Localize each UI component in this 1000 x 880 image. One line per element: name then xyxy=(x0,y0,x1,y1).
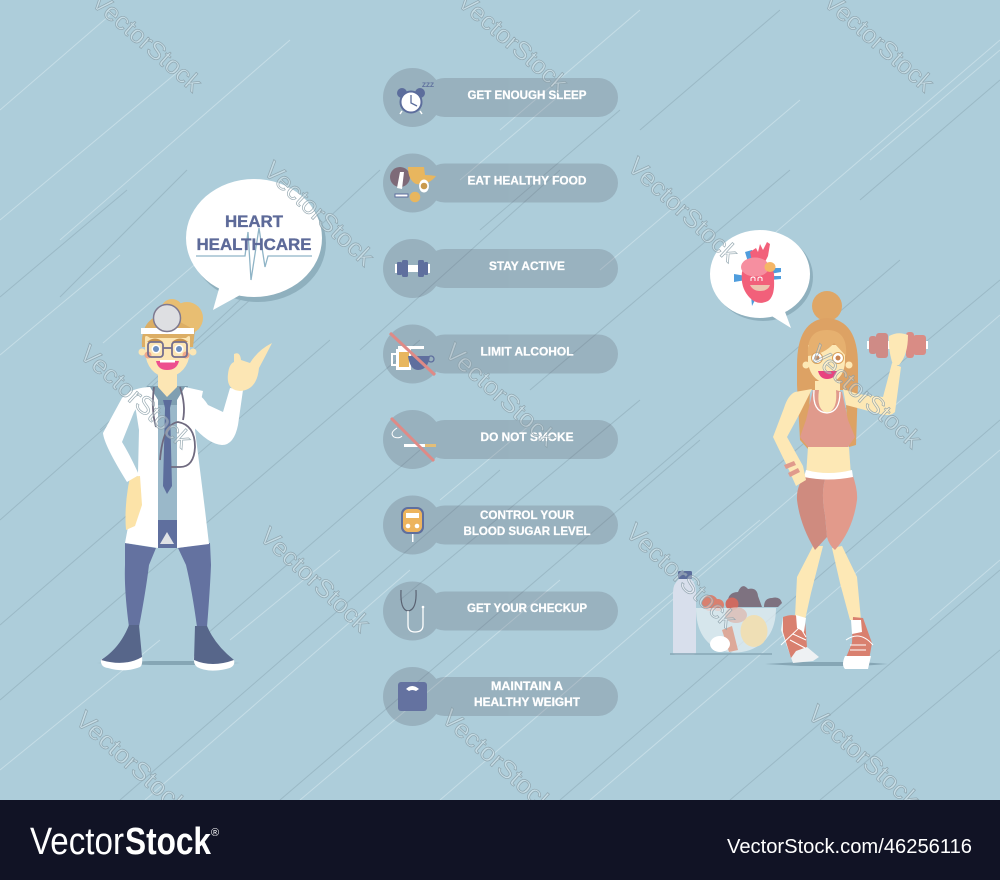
head mirror xyxy=(154,304,180,332)
footer logo: ® xyxy=(211,827,219,839)
watermarks: VectorStock xyxy=(804,340,927,454)
icon: healthy food xyxy=(390,167,436,202)
row: stay active xyxy=(383,239,618,298)
woman face xyxy=(802,330,852,384)
icon: weighing scale xyxy=(398,682,427,711)
water bottle xyxy=(673,571,696,655)
bowl glass xyxy=(696,608,776,652)
row: get your checkup: GET YOUR CHECKUP xyxy=(467,603,587,615)
doctor glasses xyxy=(148,342,187,357)
stethoscope xyxy=(153,387,195,467)
woman hair back xyxy=(797,291,858,449)
doctor ground shadow xyxy=(97,661,240,665)
watermarks: VectorStock xyxy=(436,704,559,818)
dumbbell held by woman xyxy=(867,332,928,365)
icon: crossed cigarette xyxy=(391,418,436,461)
footer logo xyxy=(30,821,219,863)
icon: alarm clock: ZZZ xyxy=(422,82,434,89)
row: maintain a healthy weight xyxy=(383,667,618,726)
doctor shirt and trousers xyxy=(158,395,177,548)
woman waistband xyxy=(804,470,853,480)
watermarks: VectorStock xyxy=(622,152,744,268)
woman legs xyxy=(795,546,861,620)
doctor tie xyxy=(163,400,172,494)
woman shorts xyxy=(797,473,857,550)
speech bubble: heart healthcare: HEALTHCARE xyxy=(196,236,312,254)
heading: HEART xyxy=(225,213,283,231)
woman raised hand xyxy=(889,333,908,365)
row: maintain a healthy weight: HEALTHY WEIGHT xyxy=(474,697,580,709)
icon: cartoon heart xyxy=(734,242,781,306)
woman mouth xyxy=(818,371,837,379)
doctor coat xyxy=(125,387,209,548)
row: get your checkup xyxy=(383,582,618,640)
doctor left arm xyxy=(103,387,150,482)
doctor right arm xyxy=(185,387,243,445)
doctor character xyxy=(97,299,272,671)
woman shoes xyxy=(781,615,873,669)
icon: dumbbell xyxy=(395,260,430,277)
row: get enough sleep xyxy=(383,68,618,127)
footer logo: Vector xyxy=(30,821,124,863)
doctor neck and collar xyxy=(147,370,188,405)
icon: alarm clock xyxy=(397,82,434,114)
footer bar xyxy=(0,800,1000,880)
woman tank top xyxy=(800,390,855,447)
woman character xyxy=(765,291,928,669)
watermarks: VectorStock xyxy=(74,340,197,454)
doctor legs xyxy=(125,543,211,627)
icon: crossed alcohol xyxy=(390,333,435,375)
doctor mouth xyxy=(156,361,179,370)
ecg line xyxy=(196,228,312,280)
row: do not smoke xyxy=(383,410,618,469)
doctor head xyxy=(138,299,203,378)
footer image id: VectorStock.com/46256116 xyxy=(727,836,972,858)
speech bubble: heart xyxy=(710,230,813,328)
row: get enough sleep: GET ENOUGH SLEEP xyxy=(468,90,587,102)
woman neck and chest xyxy=(810,381,845,415)
head band xyxy=(141,328,194,334)
row: limit alcohol: LIMIT ALCOHOL xyxy=(480,346,574,358)
icon: glucose meter xyxy=(401,507,424,542)
woman ground shadow xyxy=(765,662,888,666)
watermarks: VectorStock xyxy=(620,518,742,634)
wrist band xyxy=(784,461,800,477)
row: do not smoke: DO NOT SMOKE xyxy=(480,432,574,444)
speech bubble: heart healthcare xyxy=(186,179,326,310)
lettuce and vegetables xyxy=(702,586,782,611)
woman right arm xyxy=(843,363,901,415)
row: stay active: STAY ACTIVE xyxy=(489,261,565,273)
watermarks: VectorStock xyxy=(254,522,376,638)
doctor pointing hand xyxy=(228,343,272,391)
footer logo: Stock xyxy=(125,821,212,863)
doctor shoes xyxy=(101,625,234,671)
watermarks: VectorStock xyxy=(258,156,380,272)
bowl contents xyxy=(710,607,768,652)
row: maintain a healthy weight: MAINTAIN A xyxy=(491,681,563,693)
watermarks: VectorStock xyxy=(70,706,193,820)
row: limit alcohol xyxy=(383,324,618,384)
row: eat healthy food xyxy=(383,154,618,212)
salad bowl xyxy=(670,586,782,654)
doctor left hand xyxy=(126,476,142,530)
row: control blood sugar: BLOOD SUGAR LEVEL xyxy=(464,526,590,538)
woman left arm xyxy=(773,389,812,486)
watermarks: VectorStock xyxy=(439,338,562,452)
icon: stethoscope xyxy=(401,590,424,632)
woman waist xyxy=(806,447,851,476)
watermarks: VectorStock xyxy=(802,700,925,814)
row: eat healthy food: EAT HEALTHY FOOD xyxy=(468,176,586,188)
row: control blood sugar: CONTROL YOUR xyxy=(480,510,575,522)
bowl shadow xyxy=(670,653,772,655)
row: control blood sugar xyxy=(383,496,618,554)
